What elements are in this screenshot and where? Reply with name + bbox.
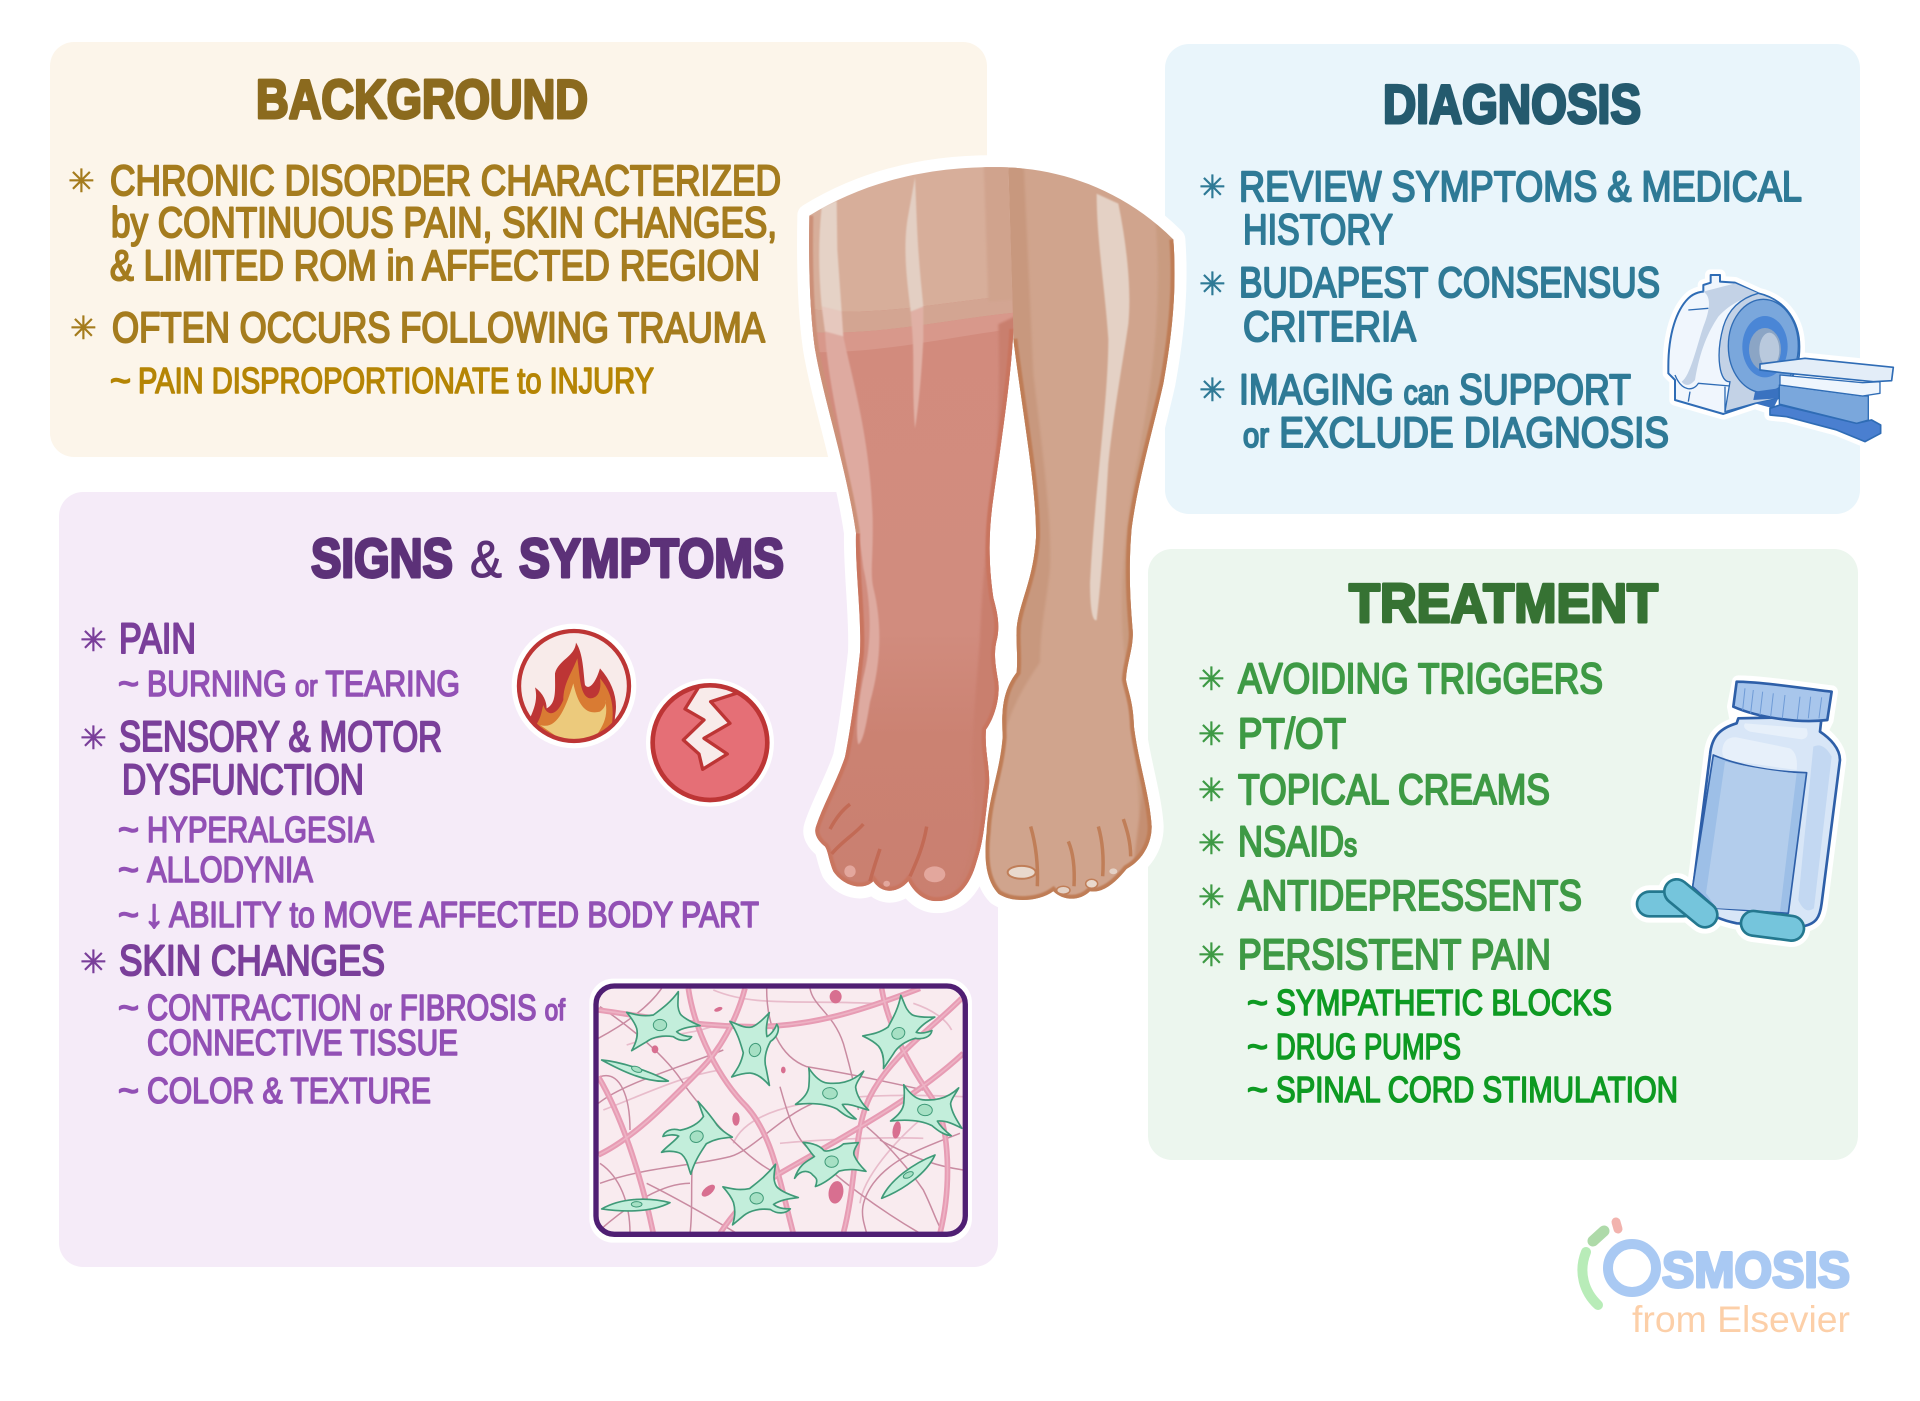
bullet: imaging: or EXCLUDE DIAGNOSIS <box>1243 409 1669 457</box>
bullet: review symptoms: HISTORY <box>1243 206 1393 254</box>
icon: burning flame <box>512 624 636 748</box>
sub-bullet: burning or tearing: BURNING or TEARING <box>147 663 460 704</box>
bullet: sensory and motor dysfunction: SENSORY & MOTOR <box>119 713 442 761</box>
heading: signs and symptoms <box>311 527 784 589</box>
bullet: budapest consensus criteria: BUDAPEST CONSENSUS <box>1239 259 1660 307</box>
sub-bullets: sensory and motor details: ALLODYNIA <box>147 849 313 890</box>
treatment bullet list: ✳ <box>1198 660 1225 698</box>
bullet: pain: PAIN <box>119 615 196 663</box>
sub-bullets: sensory and motor details: ~ <box>118 894 139 935</box>
bullet: sensory and motor dysfunction <box>80 713 442 804</box>
fibroblast cells <box>602 986 965 1225</box>
bullet: chronic disorder: & LIMITED ROM in AFFECTED REGION <box>110 242 760 290</box>
bullet: sensory and motor dysfunction: DYSFUNCTION <box>122 756 364 804</box>
bullet: skin changes: ✳ <box>80 943 107 981</box>
bullet: often occurs following trauma: OFTEN OCCURS FOLLOWING TRAUMA <box>112 304 765 352</box>
logo: Osmosis from Elsevier <box>1582 1222 1850 1340</box>
panel: treatment <box>1148 549 1858 1160</box>
bullet: review symptoms: ✳ <box>1199 168 1226 206</box>
treatment bullet list <box>1198 655 1603 979</box>
sub-bullets: sensory and motor details <box>118 809 759 936</box>
illustration: affected and unaffected legs <box>800 155 1183 911</box>
bullet: chronic disorder: by CONTINUOUS PAIN, SKIN CHANGES, <box>111 199 777 247</box>
heading: signs and symptoms: SYMPTOMS <box>519 527 784 589</box>
heading: signs and symptoms: SIGNS <box>311 527 453 589</box>
sub-bullets: skin changes details: CONNECTIVE TISSUE <box>147 1022 458 1063</box>
bullet: review symptoms <box>1199 163 1802 254</box>
bullet: chronic disorder: CHRONIC DISORDER CHARACTERIZED <box>110 157 781 205</box>
logo: Osmosis from Elsevier: SMOSIS <box>1662 1242 1850 1298</box>
sub-bullets: persistent pain options: SYMPATHETIC BLOCKS <box>1276 982 1612 1023</box>
heading: treatment: TREATMENT <box>1349 572 1658 634</box>
bullet: often occurs following trauma: ✳ <box>70 309 97 347</box>
left leg outline <box>815 329 1013 901</box>
sub-bullets: skin changes details: COLOR & TEXTURE <box>147 1070 431 1111</box>
sub-bullets: sensory and motor details: ~ <box>118 849 139 890</box>
bullet: budapest consensus criteria: CRITERIA <box>1243 303 1416 351</box>
heading: signs and symptoms: & <box>470 531 502 589</box>
treatment bullet list: ANTIDEPRESSENTS <box>1238 872 1582 920</box>
sub-bullet: burning or tearing: ~ <box>118 663 139 704</box>
bullet: budapest consensus criteria <box>1199 259 1660 351</box>
sub-bullets: persistent pain options: SPINAL CORD STIMULATION <box>1276 1069 1678 1110</box>
treatment bullet list: ✳ <box>1198 771 1225 809</box>
sub-bullets: sensory and motor details: ↓ <box>144 892 164 936</box>
logo: Osmosis from Elsevier: from Elsevier <box>1632 1299 1850 1340</box>
sub-bullets: skin changes details: CONTRACTION or FIBROSIS of <box>147 987 566 1028</box>
bullet: pain <box>80 615 196 663</box>
heading: diagnosis: DIAGNOSIS <box>1383 73 1641 135</box>
bullet: imaging: ✳ <box>1199 371 1226 409</box>
bullet: chronic disorder <box>68 157 781 290</box>
panel: diagnosis <box>1165 44 1893 514</box>
bullet: skin changes: SKIN CHANGES <box>119 937 385 985</box>
treatment bullet list: ✳ <box>1198 824 1225 862</box>
sub-bullets: skin changes details: ~ <box>118 987 139 1028</box>
treatment bullet list: ✳ <box>1198 715 1225 753</box>
panel: background <box>50 42 987 457</box>
icon: tearing crack <box>646 677 774 807</box>
bullet: pain: ✳ <box>80 621 107 659</box>
bullet: review symptoms: REVIEW SYMPTOMS & MEDICAL <box>1239 163 1802 211</box>
sub-bullets: sensory and motor details: ~ <box>118 809 139 850</box>
icon: MRI scanner <box>1668 275 1893 442</box>
bullet: budapest consensus criteria: ✳ <box>1199 265 1226 303</box>
treatment bullet list: PERSISTENT PAIN <box>1238 931 1551 979</box>
bullet: sensory and motor dysfunction: ✳ <box>80 719 107 757</box>
icon: pill bottle and capsules <box>1649 682 1840 928</box>
panel: signs and symptoms <box>59 492 998 1267</box>
treatment bullet list: ✳ <box>1198 878 1225 916</box>
sub-bullets: skin changes details <box>118 987 566 1111</box>
sub-bullets: persistent pain options: DRUG PUMPS <box>1276 1026 1461 1067</box>
affected left leg <box>809 167 1014 902</box>
sub-bullet: pain disproportionate: PAIN DISPROPORTIONATE to INJURY <box>138 360 654 401</box>
unaffected right leg <box>980 155 1183 906</box>
sub-bullets: sensory and motor details: ABILITY to MOVE AFFECTED BODY PART <box>169 894 759 935</box>
bullet: imaging: IMAGING can SUPPORT <box>1239 366 1631 414</box>
bullet: imaging <box>1199 366 1669 457</box>
treatment bullet list: ✳ <box>1198 936 1225 974</box>
sub-bullets: skin changes details: ~ <box>118 1070 139 1111</box>
sub-bullets: persistent pain options: ~ <box>1247 982 1268 1023</box>
treatment bullet list: PT/OT <box>1238 710 1346 758</box>
treatment bullet list: TOPICAL CREAMS <box>1238 766 1550 814</box>
right leg outline <box>985 240 1175 900</box>
sub-bullets: persistent pain options: ~ <box>1247 1026 1268 1067</box>
sub-bullets: sensory and motor details: HYPERALGESIA <box>147 809 374 850</box>
bullet: chronic disorder: ✳ <box>68 162 95 200</box>
sub-bullet: pain disproportionate: ~ <box>110 360 131 401</box>
illustration: fibroblasts in connective tissue <box>589 979 972 1243</box>
heading: background: BACKGROUND <box>256 68 588 130</box>
treatment bullet list: NSAIDs <box>1238 818 1357 866</box>
sub-bullets: persistent pain options <box>1247 982 1678 1110</box>
treatment bullet list: AVOIDING TRIGGERS <box>1238 655 1603 703</box>
sub-bullets: persistent pain options: ~ <box>1247 1069 1268 1110</box>
